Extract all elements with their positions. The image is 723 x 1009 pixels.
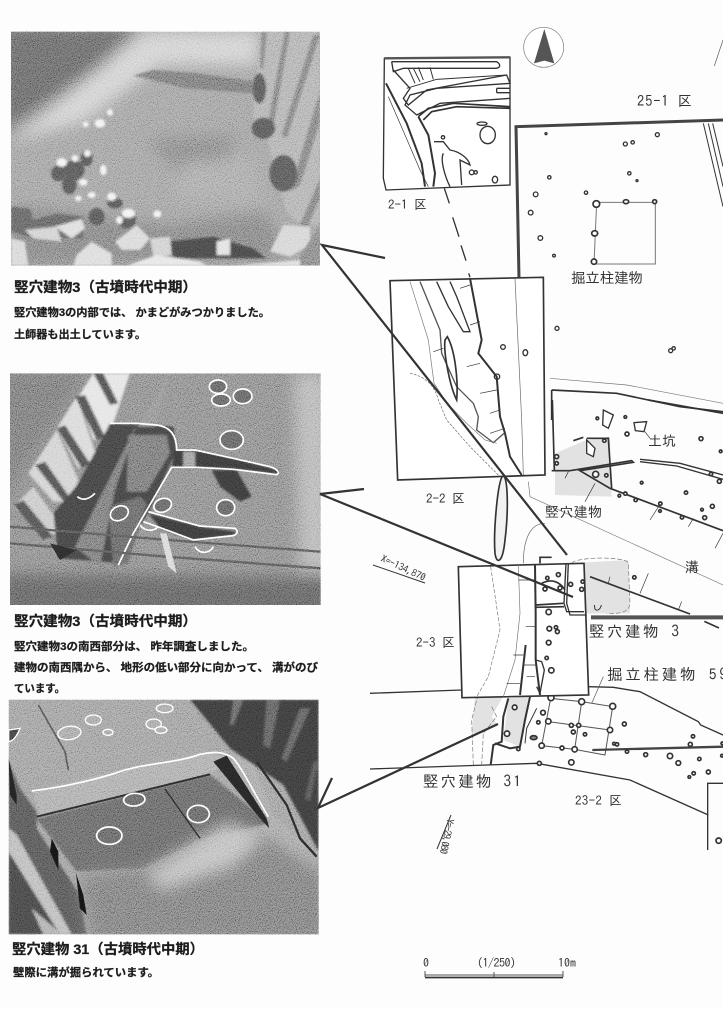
leader lines: photo 2 to map [320, 489, 573, 597]
map: site plan lower [370, 400, 723, 850]
building 3 dashed outline [572, 558, 630, 614]
survey area 25-1 boundary [516, 120, 723, 278]
sheet piles [13, 373, 278, 567]
labels: map annotations: 23-2 区 [575, 794, 622, 807]
scale bar: (1/250) [477, 956, 516, 969]
pits and ditch outlines [108, 380, 252, 524]
labels: map annotations: 溝 [685, 560, 699, 574]
text block: building 3 south-west: 竪穴建物3の南西部分は、 昨年調査しました。 [14, 639, 254, 653]
post building 59 grid [542, 698, 613, 755]
photo: south-west part of building 3 with white outlines [10, 373, 321, 605]
text block: building 3 south-west: ています。 [14, 682, 65, 695]
text block: building 3 south-west: 建物の南西隅から、 地形の低い部分に向かって、 溝がのび [14, 660, 318, 674]
stones [11, 109, 320, 266]
heading: building 3 upper: 竪穴建物3（古墳時代中期） [14, 279, 197, 295]
bottom right area box [708, 783, 723, 850]
leader lines: photo 1 to map [322, 245, 567, 555]
building 31 [491, 698, 508, 765]
label: Y grid coordinate: Y=-29,080 [438, 818, 455, 855]
scale bar: 0 [423, 957, 429, 969]
text block: building 3 interior: 土師器も出土しています。 [14, 327, 146, 341]
labels: map annotations: 竪穴建物 31 [423, 773, 521, 789]
labels: map annotations: 2-3 区 [416, 636, 455, 649]
label: X grid coordinate: X=-134,870 [379, 554, 427, 583]
post building outline [594, 202, 655, 264]
terrain boundary lines [370, 690, 462, 693]
labels: map annotations: 2-2 区 [426, 492, 465, 505]
labels: map annotations: 竪穴建物 3 [589, 623, 679, 639]
map: site plan upper [444, 27, 723, 420]
text block: building 3 south-west [14, 639, 318, 695]
labels: map annotations: 掘立柱建物 [571, 270, 643, 285]
labels: map annotations: 25-1 区 [637, 93, 692, 108]
photo: pit building 31 with wall groove [9, 700, 327, 942]
dashed line [444, 188, 470, 277]
inset: area 2-3 [458, 563, 589, 698]
heading: building 31: 竪穴建物 31（古墳時代中期） [12, 941, 204, 957]
heading: building 3 lower: 竪穴建物3（古墳時代中期） [14, 613, 197, 629]
scale bar [423, 956, 576, 978]
photo: hearth and stones in pit building 3 [0, 25, 320, 266]
labels: map annotations: 2-1 区 [388, 198, 427, 211]
shaded zones [472, 437, 630, 747]
building pit upper [552, 400, 723, 531]
long oval ditch [495, 475, 507, 560]
inset: area 2-2 [390, 277, 545, 480]
leader lines: photo 3 to map [318, 724, 498, 808]
ditch south of 25-1 [550, 378, 723, 403]
labels: map annotations: 土坑 [648, 434, 676, 448]
scale bar: 10m [558, 957, 576, 969]
labels: map annotations [388, 93, 723, 807]
ropes [10, 527, 321, 568]
labels: map annotations: 竪穴建物 [545, 504, 602, 519]
text block: building 3 interior [14, 305, 270, 341]
text block: building 31: 壁際に溝が掘られています。 [13, 965, 159, 979]
icon: north arrow [524, 27, 564, 67]
text block: building 3 interior: 竪穴建物3の内部では、 かまどがみつかりました。 [14, 305, 270, 319]
inset: area 2-1 [383, 57, 510, 190]
